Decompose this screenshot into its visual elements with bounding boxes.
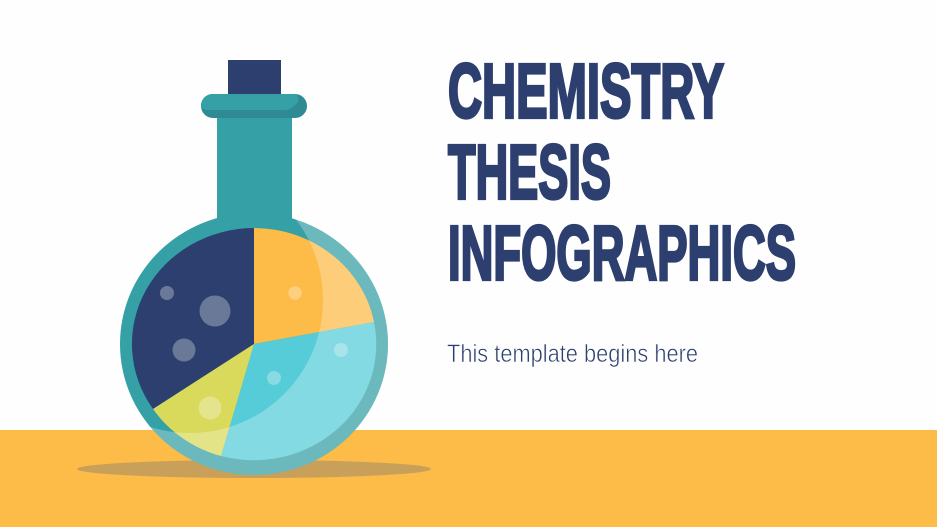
flask body ring — [120, 213, 388, 475]
pie chart — [132, 228, 376, 460]
flask illustration — [120, 60, 388, 475]
pie slice: cyan — [221, 322, 376, 460]
pie slice: navy — [132, 228, 254, 409]
pie slice: yellow — [153, 344, 254, 456]
flask neck — [217, 112, 292, 227]
title — [448, 48, 796, 296]
subtitle: This template begins here — [447, 340, 698, 368]
title: CHEMISTRY — [448, 48, 724, 134]
flask lip — [201, 94, 307, 118]
ground band — [0, 430, 937, 527]
title: THESIS — [448, 130, 611, 216]
bubbles — [160, 286, 348, 420]
flask shadow — [77, 460, 431, 478]
pie slice: orange — [254, 228, 374, 344]
flask stopper — [228, 60, 281, 95]
glass highlight — [150, 220, 388, 475]
